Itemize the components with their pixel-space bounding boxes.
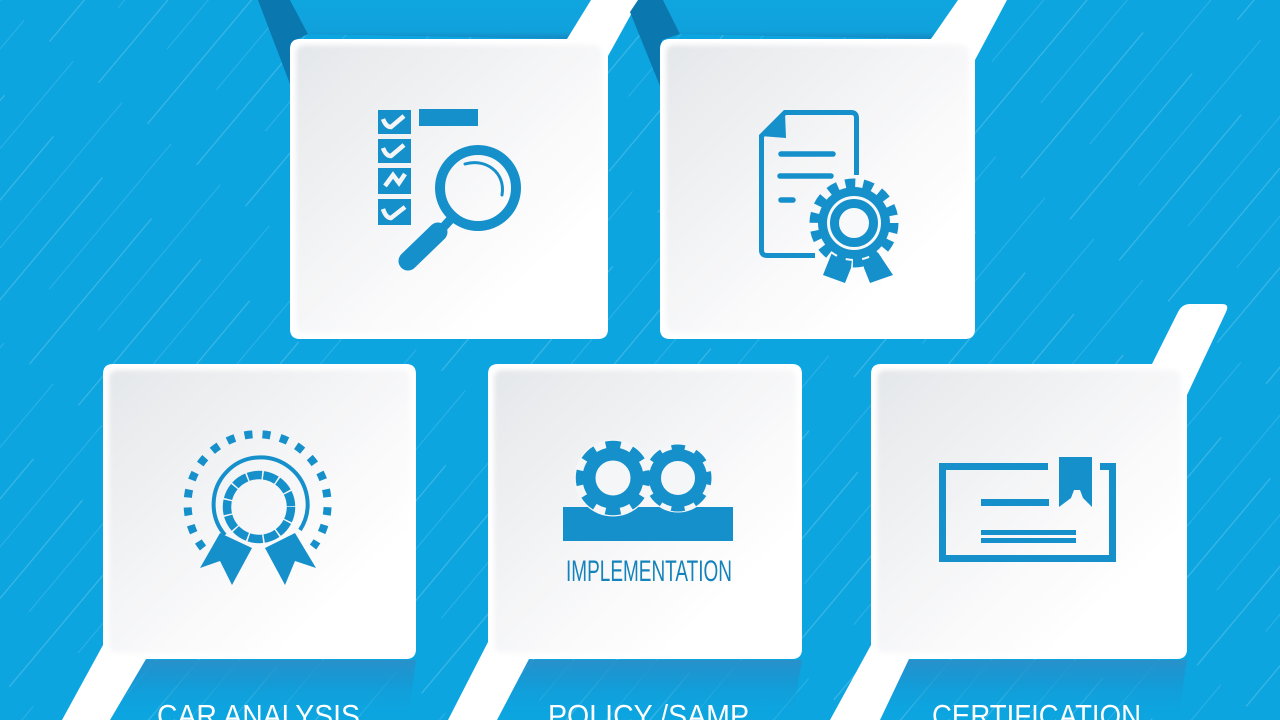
icon: rosette badge [188, 434, 328, 585]
card face [109, 370, 410, 653]
dark fold shadow [258, 0, 308, 84]
card body with tail [290, 0, 639, 339]
panel: bottom-left step 3 [62, 364, 416, 720]
card face [494, 370, 796, 653]
bevel recess [497, 660, 802, 720]
card face [877, 370, 1181, 653]
card face [296, 45, 602, 333]
icon: document with seal [760, 112, 894, 283]
card body with tail [660, 0, 1007, 339]
bevel recess [290, 0, 592, 39]
icon: gears on base [563, 440, 733, 541]
card body with tails [830, 304, 1227, 720]
icon: checklist and magnifier [378, 109, 516, 261]
panel: top-left step 1 [258, 0, 639, 339]
bevel recess [663, 0, 958, 39]
label: implementation: IMPLEMENTATION [566, 555, 732, 588]
bevel recess [110, 660, 416, 720]
panel: top-right step 2 [630, 0, 1007, 339]
icon: certificate with bookmark [942, 457, 1112, 558]
card body with tail [448, 364, 802, 720]
panel: bottom-right step 5 [830, 304, 1227, 720]
card body with tail [62, 364, 416, 720]
card face [666, 45, 969, 333]
bevel recess [880, 660, 1187, 720]
dark fold shadow [630, 0, 680, 86]
panel: bottom-middle step 4 [448, 364, 802, 720]
